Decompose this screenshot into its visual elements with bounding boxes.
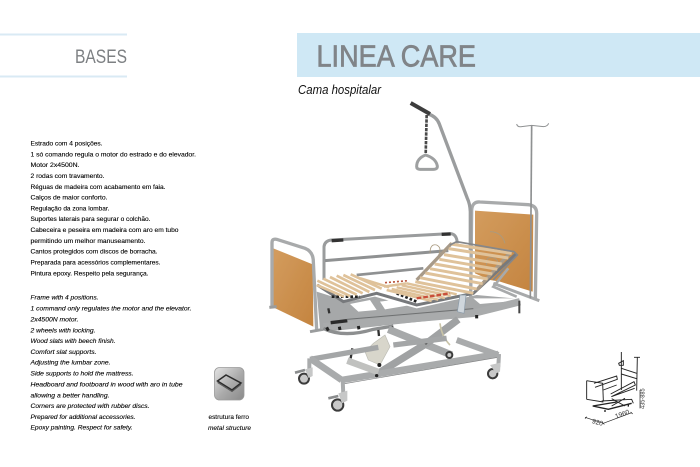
- dimension drawing: 435-885: [640, 388, 647, 409]
- lifting pole with trapeze: [411, 103, 470, 250]
- icon caption: [208, 414, 252, 432]
- text block: Portuguese features: Pintura epoxy. Respeito pela segurança.: [30, 270, 149, 277]
- text block: Portuguese features: Calços de maior conforto.: [30, 195, 108, 202]
- dimension drawing: 1960: [614, 409, 631, 421]
- side rail: [324, 234, 457, 280]
- text block: English features: Frame with 4 positions.: [30, 294, 99, 301]
- text block: Portuguese features: Réguas de madeira com acabamento em faia.: [30, 184, 166, 191]
- text block: English features: Epoxy painting. Respect for safety.: [30, 425, 133, 432]
- text block: Portuguese features: [30, 141, 196, 277]
- text block: Portuguese features: permitindo um melhor manuseamento.: [30, 238, 146, 245]
- wheel housings: [305, 363, 501, 403]
- text block: Portuguese features: Suportes laterais para segurar o colchão.: [30, 216, 151, 223]
- icon caption: estrutura ferro: [208, 414, 250, 421]
- icon caption: metal structure: [208, 425, 252, 432]
- text block: English features: Prepared for additional accessories.: [30, 414, 136, 421]
- rear headboard: [471, 202, 539, 301]
- text block: Portuguese features: 2 rodas com travamento.: [30, 173, 105, 180]
- section heading: BASES: BASES: [75, 46, 127, 68]
- scissor lift: [351, 319, 458, 373]
- wheels: [299, 352, 497, 411]
- head section slats: [415, 244, 512, 293]
- IV pole: [517, 123, 549, 298]
- text block: Portuguese features: Regulação da zona lombar.: [30, 205, 110, 212]
- slatted mattress base: [317, 242, 517, 305]
- foot board: [269, 239, 323, 332]
- text block: Portuguese features: Preparada para acessórios complementares.: [30, 260, 161, 267]
- text block: English features: Comfort slat supports.: [30, 349, 97, 356]
- text block: English features: 2x4500N motor.: [29, 316, 79, 323]
- main side beam: [323, 301, 520, 336]
- bed frame plate under slats: [317, 292, 520, 332]
- text block: English features: [29, 294, 192, 432]
- section heading: BASES: [0, 34, 127, 78]
- title banner: LINEA CARE: LINEA CARE: [316, 40, 476, 74]
- icon: metal structure: [214, 368, 244, 400]
- text block: Portuguese features: 1 só comando regula o motor do estrado e do elevador.: [30, 151, 196, 158]
- wheeled base: [295, 338, 499, 398]
- handset: [457, 295, 466, 313]
- illustration: hospital bed: [269, 103, 549, 411]
- under-structure: [317, 253, 517, 305]
- subtitle: Cama hospitalar: [298, 83, 382, 97]
- title banner: LINEA CARE: [297, 33, 700, 77]
- text block: English features: Wood slats with beech finish.: [30, 338, 116, 345]
- text block: English features: Side supports to hold the mattress.: [30, 371, 134, 378]
- text block: English features: Adjusting the lumbar zone.: [29, 360, 111, 367]
- text block: English features: Corners are protected with rubber discs.: [30, 403, 150, 410]
- text block: English features: 1 command only regulates the motor and the elevator.: [30, 306, 192, 313]
- text block: English features: allowing a better handling.: [30, 392, 110, 399]
- text block: English features: Headboard and footboard in wood with aro in tube: [30, 381, 183, 388]
- mid section slats: [384, 283, 457, 301]
- text block: Portuguese features: Cantos protegidos com discos de borracha.: [30, 249, 158, 256]
- text block: Portuguese features: Cabeceira e peseira em madeira com aro em tubo: [30, 227, 179, 234]
- text block: English features: 2 wheels with locking.: [29, 327, 96, 334]
- text block: Portuguese features: Motor 2x4500N.: [30, 162, 80, 169]
- foot section slats: [317, 274, 389, 297]
- dimension drawing: [585, 352, 647, 428]
- text block: Portuguese features: Estrado com 4 posições.: [30, 141, 103, 148]
- dimension drawing: 920: [591, 418, 604, 428]
- wires: [430, 232, 505, 272]
